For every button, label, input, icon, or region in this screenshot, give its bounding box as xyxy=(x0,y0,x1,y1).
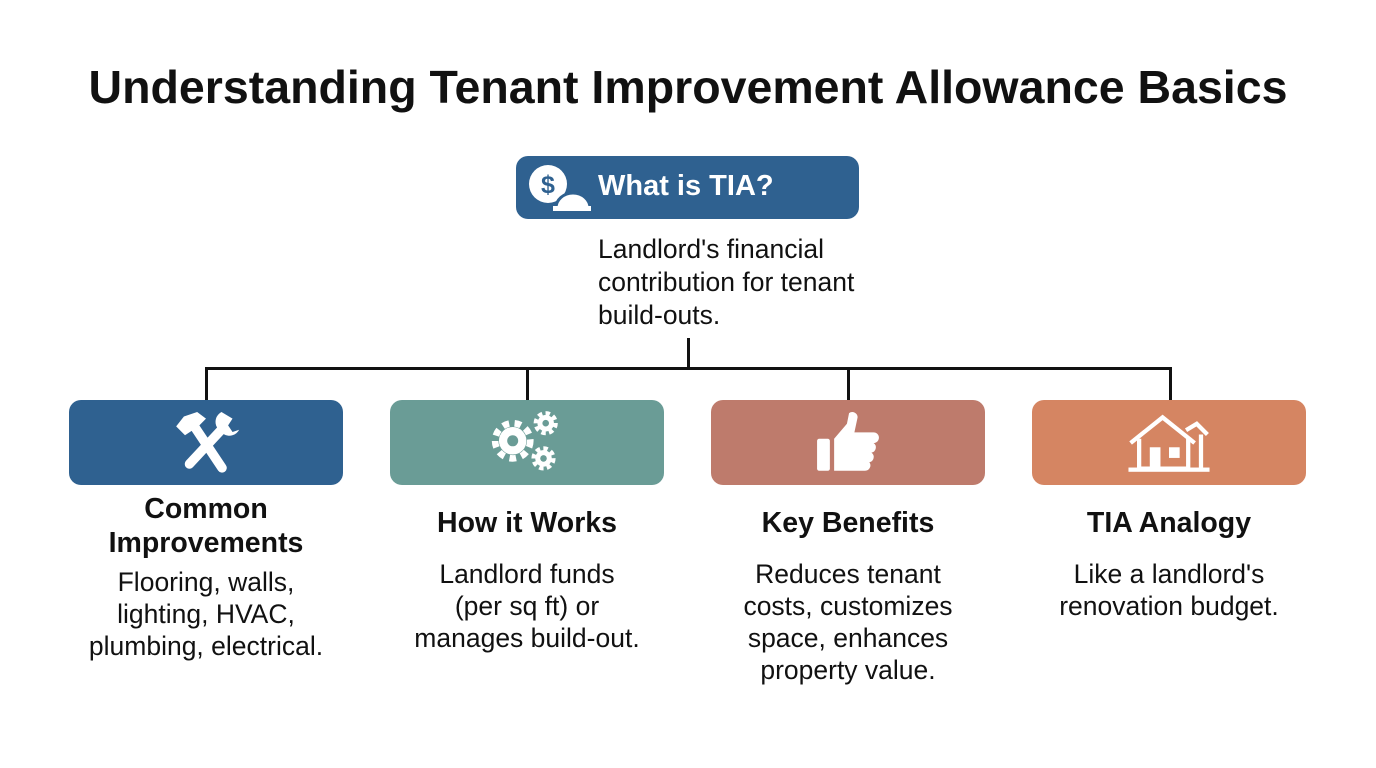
column: how it works text: (per sq ft) or xyxy=(455,591,599,621)
column: key benefits text: space, enhances xyxy=(748,623,948,653)
description text: contribution for tenant xyxy=(598,267,854,297)
header box: What is TIA: What is TIA? xyxy=(598,170,774,202)
column: common improvements text: plumbing, electrical. xyxy=(89,631,323,661)
description text: build-outs. xyxy=(598,300,720,330)
column: common improvements text xyxy=(89,493,323,661)
column: how it works text xyxy=(414,507,640,653)
icon: gears xyxy=(492,411,558,470)
header box: What is TIA xyxy=(516,156,859,219)
box: how it works icon xyxy=(390,400,664,485)
column: key benefits text xyxy=(743,507,953,685)
column: common improvements text: lighting, HVAC, xyxy=(117,599,295,629)
column: how it works text: Landlord funds xyxy=(439,559,615,589)
column: key benefits text: Key Benefits xyxy=(762,507,934,539)
column: how it works text: How it Works xyxy=(437,507,617,539)
title: Understanding Tenant Improvement Allowance Basics xyxy=(89,61,1287,113)
icon: dollar coin and hard hat: $ xyxy=(541,171,555,199)
column: common improvements text: Improvements xyxy=(109,527,303,559)
column: key benefits text: property value. xyxy=(760,655,936,685)
icon: dollar coin and hard hat xyxy=(529,165,591,211)
icon: house xyxy=(1128,414,1210,472)
description text xyxy=(598,234,854,330)
icon: thumbs up xyxy=(817,412,879,471)
column: TIA analogy text xyxy=(1059,507,1279,621)
box: common improvements icon xyxy=(69,400,343,485)
column: TIA analogy text: Like a landlord's xyxy=(1074,559,1264,589)
column: key benefits text: Reduces tenant xyxy=(755,559,941,589)
box: key benefits icon xyxy=(711,400,985,485)
column: how it works text: manages build-out. xyxy=(414,623,640,653)
column: key benefits text: costs, customizes xyxy=(743,591,953,621)
column: common improvements text: Flooring, walls, xyxy=(118,567,294,597)
column: common improvements text: Common xyxy=(144,493,268,525)
description text: Landlord's financial xyxy=(598,234,824,264)
column: TIA analogy text: renovation budget. xyxy=(1059,591,1279,621)
box: TIA analogy icon xyxy=(1032,400,1306,485)
icon: hammer and wrench xyxy=(176,412,240,473)
column: TIA analogy text: TIA Analogy xyxy=(1087,507,1251,539)
